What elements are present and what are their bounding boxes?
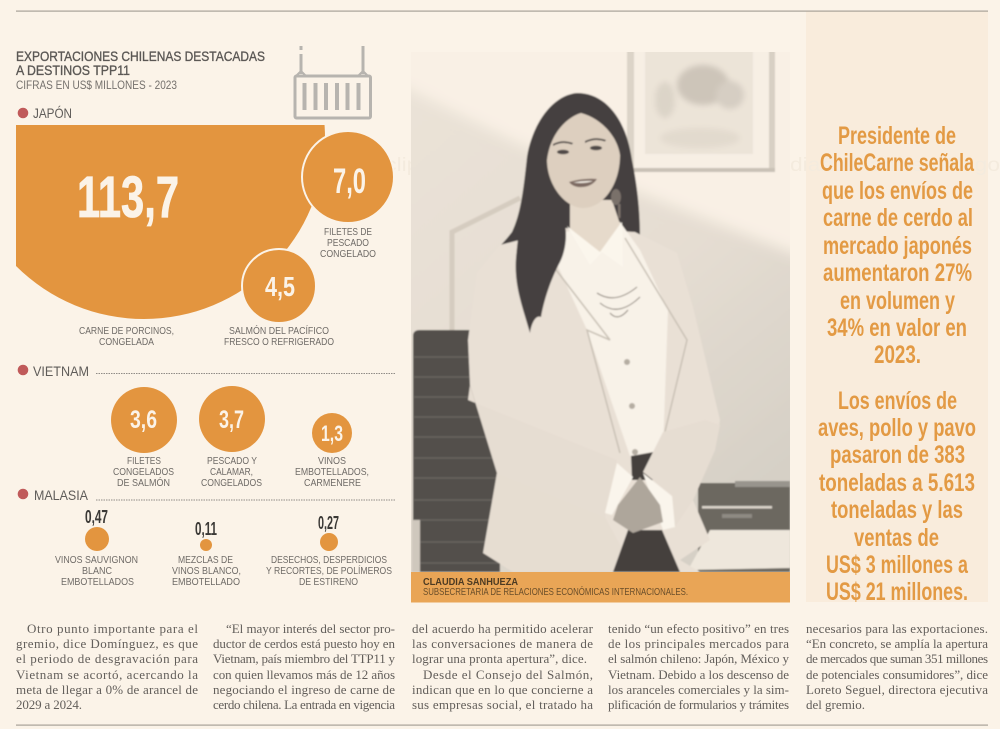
labels: Vietnam: PESCADO Y — [207, 455, 257, 467]
face — [547, 113, 620, 208]
bubble: 0,27 — [318, 513, 339, 551]
neck — [570, 200, 620, 252]
bubble: 1,3: 1,3 — [321, 421, 343, 446]
bubble: 3,7 — [199, 386, 265, 452]
article text: column 2 — [213, 621, 396, 712]
watermark: diariofinanciero#lagonzalet@e-clip.cl — [72, 155, 442, 176]
article text: column 4: de los principales mercados para — [608, 636, 789, 651]
section heading: Vietnam — [18, 363, 396, 379]
labels: Vietnam: VINOS — [318, 455, 346, 467]
labels: Vietnam: EMBOTELLADOS, — [295, 466, 369, 478]
article text: column 3: sus empresas social, el tratado ha — [412, 697, 593, 712]
bubble: 0,11 — [195, 519, 217, 551]
article text: column 3: Desde el Consejo del Salmón, — [423, 667, 593, 682]
article text: column 3 — [412, 621, 594, 712]
article text: column 3: del acuerdo ha permitido acelerar — [412, 621, 594, 636]
icon: shipping container — [295, 46, 370, 118]
bubble: 3,6: 3,6 — [130, 406, 157, 434]
lamp — [452, 198, 520, 340]
article text: column 2: con quien llevamos más de 12 años — [213, 667, 395, 682]
sleeves, cuffs and hands — [467, 385, 675, 534]
article text: column 1: Vietnam se acortó, acercando la — [16, 667, 198, 682]
caption band: CLAUDIA SANHUEZA — [423, 576, 518, 588]
eyes and mouth — [553, 138, 606, 187]
pull quote: ChileCarne: en volumen y — [840, 287, 955, 315]
article text: column 1: Otro punto importante para el — [27, 621, 198, 636]
labels: Vietnam: CONGELADOS — [113, 466, 174, 478]
chair — [412, 330, 500, 572]
article text: column 4: tenido “un efecto positivo” en tres — [608, 621, 789, 636]
labels: Japón: PESCADO — [327, 237, 369, 249]
section heading: Japón: JAPÓN — [33, 105, 72, 121]
article text: column 2: cerdo chilena. La entrada en vigencia — [213, 697, 395, 712]
pull quote: ChileCarne — [820, 122, 975, 369]
article text: column 4: los aranceles comerciales y la sim- — [608, 682, 789, 697]
shirt buttons — [624, 359, 638, 455]
labels: Malasia: BLANC — [82, 565, 112, 577]
labels: Japón: FILETES DE — [324, 226, 372, 238]
labels: Vietnam: CONGELADOS — [201, 477, 262, 489]
article text: column 2: ductor de cerdos está puesto hoy en — [213, 636, 396, 651]
necklace — [597, 287, 640, 317]
desk and papers — [688, 481, 790, 572]
bubble: 1,3 — [312, 413, 352, 453]
panel: right sidebar background — [806, 11, 988, 602]
article text: column 4: Vietnam. Debido a los descenso de — [608, 667, 789, 682]
bubble: filetes de pescado 7,0 — [302, 131, 394, 223]
labels: Vietnam: FILETES — [127, 455, 161, 467]
labels: Malasia: VINOS SAUVIGNON — [55, 554, 138, 566]
title block: A DESTINOS TPP11 — [16, 62, 130, 78]
pull quote: aves: ventas de — [854, 524, 939, 552]
labels: Japón: SALMÓN DEL PACÍFICO — [229, 324, 329, 337]
jacket — [468, 228, 720, 572]
photo: Claudia Sanhueza portrait — [411, 52, 790, 572]
article text: column 3: indican que en lo que concierne a — [412, 682, 593, 697]
pull quote: aves: Los envíos de — [838, 387, 957, 415]
labels: Malasia: VINOS BLANCO, — [172, 565, 241, 577]
labels: Japón: CARNE DE PORCINOS, — [79, 325, 174, 337]
labels: Japón: FRESCO O REFRIGERADO — [224, 336, 334, 348]
skirt — [613, 450, 680, 572]
article text: column 3: las conversaciones de manera de — [412, 636, 593, 651]
labels: Malasia: Y RECORTES, DE POLÍMEROS — [266, 564, 392, 577]
article text: column 5: Loreto Seguel, directora ejecutiva — [806, 682, 988, 697]
earring — [611, 189, 621, 218]
bubble: 3,6 — [111, 387, 177, 453]
caption band — [411, 572, 790, 602]
article text: column 2: “El mayor interés del sector pro- — [226, 621, 395, 636]
labels: Vietnam: CALAMAR, — [210, 466, 253, 478]
labels: Malasia: EMBOTELLADO — [172, 576, 240, 588]
collar — [566, 221, 624, 246]
blouse — [555, 222, 668, 456]
chart: Malasia bubbles — [55, 507, 392, 588]
labels: Malasia: DESECHOS, DESPERDICIOS — [271, 554, 387, 566]
lapels — [550, 238, 687, 453]
pull quote: ChileCarne: Presidente de — [838, 122, 956, 150]
bubble: 3,7: 3,7 — [219, 406, 244, 434]
chart: Japón bubbles — [16, 125, 394, 345]
article text: column 4 — [608, 621, 790, 712]
labels: Malasia: EMBOTELLADOS — [61, 576, 134, 588]
article text: column 1: gremio, dice Domínguez, es que — [16, 636, 198, 651]
section heading: Japón — [18, 105, 72, 121]
bubble: filetes de pescado 7,0: 7,0 — [333, 162, 366, 201]
labels: Japón: CONGELADA — [99, 336, 154, 348]
labels: Vietnam: CARMENERE — [304, 477, 361, 489]
article text: column 5: necesarios para las exportaciones. — [806, 621, 988, 636]
article text: column 1: meta de llegar a 0% de arancel de — [16, 682, 198, 697]
labels: Malasia: DE ESTIRENO — [299, 576, 358, 588]
article text: column 4: el salmón chileno: Japón, México y — [608, 651, 790, 666]
watermark: diariofinanciero#lago — [790, 155, 1000, 176]
article text: column 1: 2029 a 2024. — [16, 697, 82, 712]
labels: Vietnam: DE SALMÓN — [117, 476, 170, 489]
bubble: 0,47 — [85, 507, 109, 551]
labels: Japón: CONGELADO — [320, 248, 376, 260]
hair front strand — [514, 227, 567, 333]
article text: column 1 — [16, 621, 198, 712]
pull quote: ChileCarne: 2023. — [874, 341, 921, 369]
picture frame — [627, 40, 775, 172]
article text: column 5: del gremio. — [806, 697, 865, 712]
article text: column 5 — [806, 621, 988, 712]
chart: Vietnam bubbles — [111, 386, 369, 489]
article text: column 5: “En concreto, se amplía la apertura — [806, 636, 988, 651]
labels: Vietnam — [113, 455, 369, 489]
bubble: 0,27: 0,27 — [318, 513, 339, 533]
title block — [16, 48, 265, 92]
title block: EXPORTACIONES CHILENAS DESTACADAS — [16, 48, 265, 64]
article text: column 2: negociando el ingreso de carne de — [213, 682, 395, 697]
section heading: Malasia — [18, 487, 396, 503]
bubble: carne de porcinos 113,7 — [16, 125, 325, 319]
labels: Malasia — [55, 554, 392, 588]
section heading: Malasia: MALASIA — [34, 487, 89, 503]
caption band: SUBSECRETARIA DE RELACIONES ECONÓMICAS INTERNACIONALES. — [423, 585, 688, 598]
watermark — [72, 155, 1000, 176]
article text: column 4: plificación de formularios y trámites — [608, 697, 789, 712]
bubble: salmón del pacífico 4,5 — [242, 249, 316, 323]
bubble: carne de porcinos 113,7: 113,7 — [77, 165, 179, 230]
pull quote: aves — [818, 387, 976, 606]
title block: CIFRAS EN US$ MILLONES - 2023 — [16, 78, 177, 92]
labels: Malasia: MEZCLAS DE — [178, 554, 233, 566]
hair back — [501, 92, 641, 246]
jacket lower shade — [484, 473, 623, 572]
bubble: 0,11: 0,11 — [195, 519, 217, 539]
labels: Japón — [79, 226, 376, 348]
article text: column 3: lograr una pronta apertura”, dice. — [412, 651, 587, 666]
section heading: Vietnam: VIETNAM — [33, 363, 89, 379]
article text: column 5: de potenciales consumidores”, dice — [806, 667, 988, 682]
article text: column 1: el periodo de desgravación para — [16, 651, 198, 666]
bubble: 0,47: 0,47 — [85, 507, 108, 527]
bubble: salmón del pacífico 4,5: 4,5 — [265, 271, 295, 302]
article text: column 5: de mercados que suman 351 millones — [806, 651, 988, 666]
article text: column 2: Vietnam, país miembro del TTP11 y — [213, 651, 396, 666]
